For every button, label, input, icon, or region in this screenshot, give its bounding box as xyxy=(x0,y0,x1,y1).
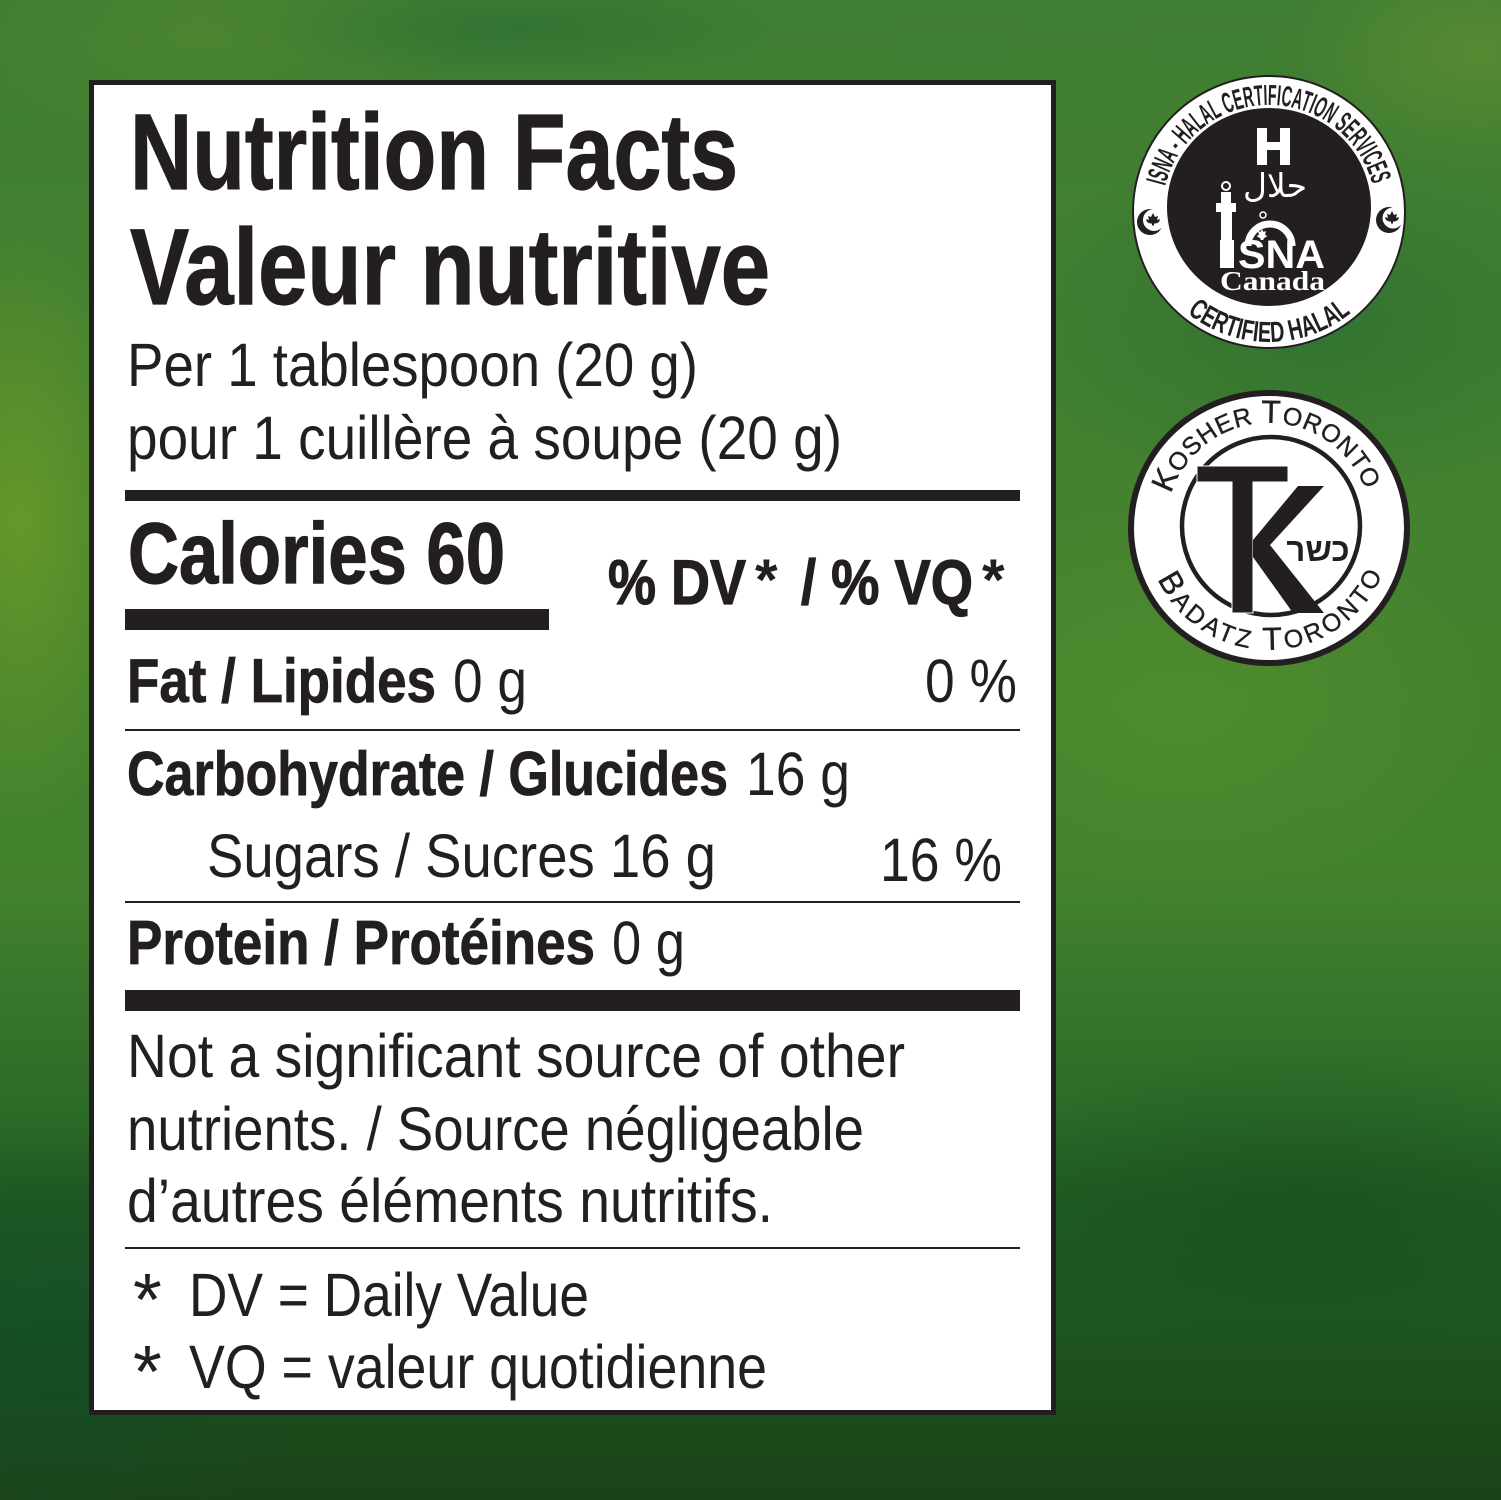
row: protein: Protein / Protéines xyxy=(127,909,595,978)
serving size english: Per 1 tablespoon (20 g) xyxy=(127,331,698,399)
letter H xyxy=(1257,128,1290,165)
row: fat: 0 % xyxy=(925,647,1017,715)
icon: ISNA Canada halal badge xyxy=(1132,75,1406,349)
minaret xyxy=(1216,182,1236,268)
crescent left xyxy=(1137,209,1165,235)
row: carbohydrate: 16 g xyxy=(746,740,850,808)
row: sugars xyxy=(207,822,1002,894)
icon: Kosher Toronto badge xyxy=(1128,390,1410,666)
SNA letters: SNA xyxy=(1238,233,1325,277)
footnote: daily value: * xyxy=(133,1258,162,1341)
dome arch xyxy=(1248,224,1292,246)
footnote: valeur quotidienne: VQ = valeur quotidienne xyxy=(189,1333,767,1401)
row: carbohydrate: Carbohydrate / Glucides xyxy=(127,740,728,809)
note text: nutrients. / Source négligeable xyxy=(127,1095,864,1163)
crescent right xyxy=(1376,207,1404,233)
footnote: valeur quotidienne xyxy=(133,1330,767,1413)
maple leaf xyxy=(1256,229,1268,240)
ring text: Badatz Toronto: BADATZ TORONTO xyxy=(1158,570,1380,650)
letter T xyxy=(1197,466,1288,613)
daily value header xyxy=(608,548,1005,618)
Canada: Canada xyxy=(1220,266,1326,296)
panel: nutrition facts xyxy=(92,82,1054,1413)
footnote: valeur quotidienne: * xyxy=(133,1330,162,1413)
badge ring text: ISNA Halal Certification Services: ISNA - HALAL CERTIFICATION SERVICES xyxy=(1146,85,1391,186)
letter K xyxy=(1253,486,1324,613)
row: fat: 0 g xyxy=(453,647,527,715)
note text: d’autres éléments nutritifs. xyxy=(127,1167,773,1235)
row: sugars: 16 % xyxy=(880,826,1002,894)
footnote: daily value: DV = Daily Value xyxy=(189,1261,589,1329)
serving size french: pour 1 cuillère à soupe (20 g) xyxy=(127,404,842,472)
daily value header: / % VQ xyxy=(801,548,973,618)
calories: Calories 60 xyxy=(128,506,505,602)
hebrew kosher: כשר xyxy=(1286,531,1350,568)
note text: Not a significant source of other xyxy=(127,1022,905,1090)
row: protein: 0 g xyxy=(612,909,685,977)
arabic halal: حلال xyxy=(1243,166,1307,205)
row: sugars: Sugars / Sucres 16 g xyxy=(207,822,716,890)
panel background xyxy=(92,82,1054,1412)
heading: Valeur nutritive: Valeur nutritive xyxy=(130,206,770,327)
daily value header: * xyxy=(755,548,778,613)
badge ring text: Certified Halal: CERTIFIED HALAL xyxy=(1190,300,1350,342)
daily value header: * xyxy=(982,548,1005,613)
row: fat: Fat / Lipides xyxy=(127,647,436,716)
daily value header: % DV xyxy=(608,548,746,618)
footnote: daily value xyxy=(133,1258,589,1341)
ring text: Kosher Toronto: KOSHER TORONTO xyxy=(1151,400,1379,492)
note text xyxy=(127,1022,905,1235)
row: fat xyxy=(127,647,1017,716)
heading: Nutrition Facts: Nutrition Facts xyxy=(130,91,738,212)
